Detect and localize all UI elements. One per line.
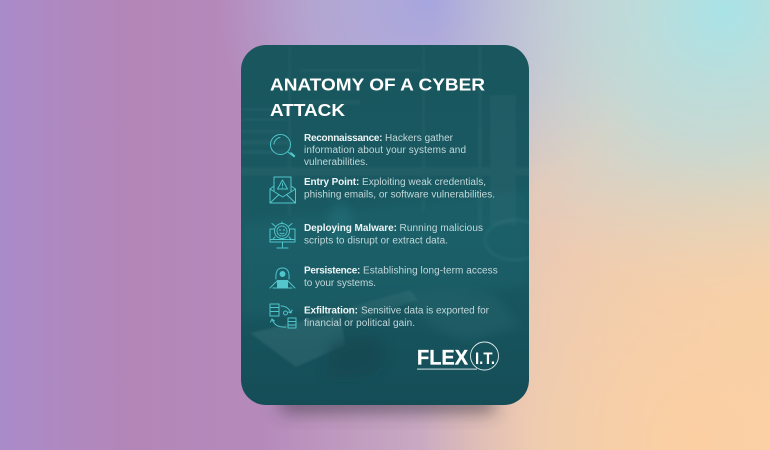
step: persistence: Establishing long-term access (363, 266, 498, 277)
icon: data exfiltration (270, 304, 296, 328)
icon: magnifying glass (270, 134, 294, 156)
step: persistence: Persistence: (304, 266, 360, 277)
step: reconnaissance: vulnerabilities. (304, 157, 368, 168)
title: ANATOMY OF A CYBER (270, 75, 485, 95)
icon: hooded hacker (270, 268, 295, 288)
icon: warning envelope (270, 177, 296, 203)
step: deploying malware: Running malicious (400, 223, 483, 234)
step: entry point: Exploiting weak credentials, (362, 177, 486, 188)
step: entry point (304, 177, 495, 200)
logo: Flex IT: FLEX (417, 346, 468, 369)
step: deploying malware: Deploying Malware: (304, 223, 397, 234)
card shadow (280, 394, 495, 412)
step: reconnaissance: Reconnaissance: (304, 133, 382, 144)
step: entry point: Entry Point: (304, 177, 359, 188)
logo: Flex IT (417, 342, 498, 370)
step: exfiltration: Exfiltration: (304, 306, 358, 317)
step: persistence: to your systems. (304, 278, 376, 289)
step: exfiltration: financial or political gain. (304, 318, 415, 329)
panel: card (241, 45, 545, 405)
icon: malware monitor (270, 222, 295, 248)
step: entry point: phishing emails, or software vulnerabilities. (304, 190, 495, 200)
step: persistence (304, 266, 498, 289)
step: deploying malware: scripts to disrupt or extract data. (304, 236, 448, 247)
step: reconnaissance (304, 133, 466, 168)
title: ATTACK (270, 100, 345, 120)
step: exfiltration (304, 306, 490, 329)
logo: Flex IT: I.T. (475, 350, 495, 368)
step: deploying malware (304, 223, 483, 247)
step: exfiltration: Sensitive data is exported for (361, 306, 490, 317)
step: reconnaissance: information about your systems and (304, 145, 466, 156)
step: reconnaissance: Hackers gather (385, 133, 454, 144)
title (270, 75, 485, 120)
faint photo of screens, keyboard and hands (252, 190, 529, 366)
